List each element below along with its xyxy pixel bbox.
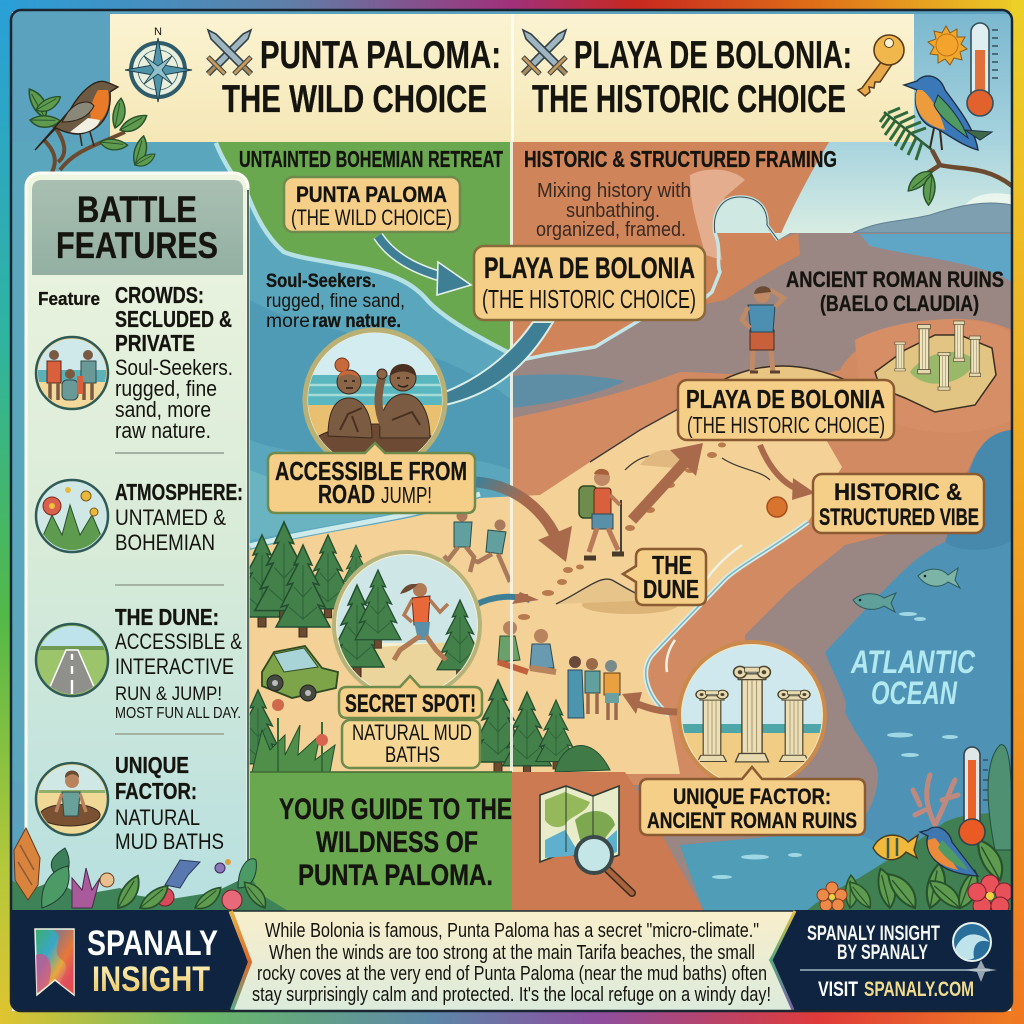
map: terracotta headland, Bolonia side [512, 142, 829, 362]
label: unique factor ruins: ANCIENT ROMAN RUINS [647, 808, 857, 833]
footer: left brand block [11, 910, 250, 1012]
title: Playa de Bolonia: PLAYA DE BOLONIA: [574, 34, 852, 77]
medallion: roman columns [679, 642, 825, 793]
footer: right promo block: VISIT [818, 978, 858, 1001]
footer: right promo block: SPANALY INSIGHT [807, 922, 940, 945]
medallion: mud bath couple [303, 330, 447, 488]
label: Punta Paloma: PUNTA PALOMA [296, 182, 447, 207]
icon: crossed swords left [208, 30, 251, 74]
text: mixing history note: sunbathing. [566, 200, 660, 222]
text: crowds: PRIVATE [115, 330, 195, 356]
title: Punta Paloma: THE WILD CHOICE [222, 78, 487, 121]
center divider [510, 142, 513, 772]
footer: right promo block: BY SPANALY [837, 941, 928, 964]
ruins island [855, 320, 997, 413]
text: crowds: Soul-Seekers. [115, 355, 233, 380]
label: Playa de Bolonia main: (THE HISTORIC CHOICE) [482, 284, 696, 314]
text: ruins label [786, 267, 1004, 316]
text: crowds: SECLUDED & [115, 306, 232, 332]
footer text: rocky coves at the very end of Punta Paloma (near the mud baths) often [257, 963, 767, 985]
text: your guide: YOUR GUIDE TO THE [279, 793, 512, 826]
label: Playa de Bolonia main: PLAYA DE BOLONIA [484, 252, 695, 285]
illustration: robin on branch [28, 81, 157, 172]
title: Punta Paloma [222, 40, 498, 113]
label: accessible from road [268, 443, 475, 513]
car [262, 646, 338, 701]
label: Playa de Bolonia on map: PLAYA DE BOLONIA [686, 384, 885, 414]
label: secret spot: SECRET SPOT! [345, 690, 476, 718]
text: the dune: INTERACTIVE [115, 654, 234, 679]
text: atmosphere: BOHEMIAN [115, 530, 215, 555]
arrow: beach to historic label [632, 443, 703, 520]
icon: crowd circle [36, 337, 108, 409]
arrow: to historic vibe [760, 445, 815, 500]
arrow: road to beach [476, 482, 572, 562]
footer: right promo block: SPANALY.COM [864, 978, 974, 1001]
label: Playa de Bolonia on map: (THE HISTORIC CHOICE) [687, 412, 885, 438]
text: Atlantic Ocean [850, 650, 976, 704]
map: sea strip top right [860, 234, 1012, 282]
icon: crossed swords right [523, 30, 566, 74]
text: atmosphere [115, 479, 243, 555]
ocean ripples [712, 612, 958, 879]
subheading: historic framing: HISTORIC & STRUCTURED FRAMING [524, 146, 837, 172]
icon: thermometer bottom [959, 747, 988, 845]
bottom right terracotta with map [512, 772, 704, 912]
text: soul-seekers note [266, 271, 405, 332]
label: the dune: THE [652, 550, 692, 580]
text: mixing history note: organized, framed. [536, 219, 686, 241]
panel heading: BATTLE [77, 189, 197, 230]
text: soul-seekers note: rugged, fine sand, [266, 291, 405, 312]
map: gray-brown shallows [512, 233, 1012, 913]
illustration: tropical fish [873, 835, 918, 860]
footer text [252, 920, 771, 1006]
panel heading: FEATURES [56, 225, 218, 266]
text: mixing history note: Mixing history with [537, 180, 691, 202]
label: Punta Paloma: (THE WILD CHOICE) [291, 205, 452, 230]
footer: centre insight strip [226, 911, 797, 1011]
hiker with backpack [579, 469, 624, 558]
text: unique factor: FACTOR: [115, 778, 197, 804]
text: unique factor: NATURAL [115, 805, 200, 830]
text: your guide [279, 798, 512, 886]
runners on the beach [444, 510, 510, 582]
footer text: When the winds are too strong at the main Tarifa beaches, the small [269, 942, 755, 964]
label: accessible from road: ROAD [318, 479, 375, 509]
text: the dune: MOST FUN ALL DAY. [115, 705, 241, 722]
text: crowds [115, 282, 233, 443]
text: crowds: CROWDS: [115, 282, 204, 308]
text: the dune: ACCESSIBLE & [115, 629, 242, 654]
text: Atlantic Ocean: OCEAN [871, 675, 958, 711]
panel: battle features [26, 173, 248, 918]
text: soul-seekers note: raw nature. [312, 311, 401, 332]
label: unique factor ruins [640, 767, 865, 835]
text: crowds: rugged, fine [115, 376, 217, 401]
footprints trail [518, 442, 726, 620]
orange marker [767, 497, 787, 517]
observer on mound [724, 286, 844, 379]
text: soul-seekers note: more [266, 311, 310, 332]
label: historic and structured vibe [813, 474, 984, 533]
bottom left green banner [250, 772, 512, 912]
brand name: INSIGHT [92, 960, 210, 999]
text: the dune: THE DUNE: [115, 604, 219, 630]
bushes and flowers [252, 699, 335, 772]
label: Playa de Bolonia main [474, 246, 705, 320]
footer text: stay surprisingly calm and protected. It's the local refuge on a windy day! [252, 984, 771, 1006]
text: soul-seekers note: Soul-Seekers. [266, 271, 376, 292]
illustration: tropical corner bottom right [805, 745, 1013, 915]
footer text: While Bolonia is famous, Punta Paloma has a secret "micro-climate." [265, 920, 759, 942]
icon: wave logo [953, 923, 997, 982]
text: unique factor: UNIQUE [115, 752, 189, 778]
subheading: bohemian retreat: UNTAINTED BOHEMIAN RETREAT [239, 146, 503, 172]
text: mixing history note [536, 180, 691, 241]
map: Atlantic sea [680, 430, 1012, 912]
icon: thermometer top [967, 23, 998, 116]
icon: compass: N [154, 26, 162, 38]
illustration: blue bird on branch [880, 76, 1012, 206]
map: green land, Punta Paloma side [218, 142, 512, 352]
sitting group [498, 621, 556, 672]
text: atmosphere: ATMOSPHERE: [115, 479, 243, 505]
label: unique factor ruins: UNIQUE FACTOR: [673, 784, 831, 809]
label: accessible from road: ACCESSIBLE FROM [275, 456, 467, 486]
standing group [568, 656, 620, 720]
label: natural mud baths: BATHS [385, 742, 440, 767]
text: Atlantic Ocean: ATLANTIC [850, 644, 976, 680]
column label: Feature [38, 289, 100, 309]
text: the dune: RUN & JUMP! [115, 684, 222, 705]
text: atmosphere: UNTAMED & [115, 505, 226, 530]
panel heading [32, 180, 243, 275]
icon: compass [125, 26, 192, 102]
icon: sun [928, 26, 967, 65]
arrow: Punta Paloma to Bolonia [378, 236, 471, 295]
text: the dune [115, 604, 242, 722]
forest: trees on the beach [234, 522, 610, 775]
arrow: pointer from Bolonia label to mud medallion [445, 322, 553, 405]
text: your guide: PUNTA PALOMA. [298, 859, 493, 892]
fish [853, 568, 960, 612]
dune sand hill [556, 450, 700, 614]
footer: right promo block [770, 910, 1012, 1012]
medallion: runner in forest [330, 552, 483, 700]
label: the dune [623, 549, 706, 605]
arrow: ruins medallion to visitors [622, 692, 678, 714]
text: crowds: raw nature. [115, 418, 211, 443]
illustration: small bird [920, 827, 978, 876]
map: sky, mountain and sea top right [781, 142, 1011, 233]
text: ruins label: (BAELO CLAUDIA) [820, 291, 979, 316]
label: natural mud baths [342, 720, 480, 768]
brand name: SPANALY [87, 924, 218, 963]
brand name [87, 924, 218, 999]
icon: rainbow pennant [35, 929, 74, 995]
text: unique factor [115, 752, 224, 854]
arrow: mud medallion to dune [475, 592, 539, 605]
map: terracotta shore band [512, 319, 1012, 785]
map: central sand beach [250, 385, 842, 774]
illustration: jungle foliage bottom left [11, 828, 290, 912]
text: your guide: WILDNESS OF [316, 826, 478, 859]
label: the dune: DUNE [643, 574, 699, 604]
text: unique factor: MUD BATHS [115, 829, 224, 854]
title: Punta Paloma: PUNTA PALOMA: [260, 34, 501, 77]
title: Playa de Bolonia [532, 40, 850, 113]
label: secret spot [339, 676, 482, 718]
header band [110, 14, 1012, 142]
icon: key [858, 35, 904, 96]
label: natural mud baths: NATURAL MUD [352, 720, 472, 745]
icon: map and magnifier [540, 786, 632, 893]
label: historic and structured vibe: HISTORIC & [834, 479, 962, 506]
title: Playa de Bolonia: THE HISTORIC CHOICE [532, 78, 846, 121]
label: accessible from road: JUMP! [381, 482, 432, 508]
label: Playa de Bolonia on map [678, 380, 894, 440]
text: crowds: sand, more [115, 397, 211, 422]
label: Punta Paloma [284, 177, 460, 232]
icon: mud bath circle [36, 763, 108, 835]
icon: road circle [36, 624, 108, 696]
map: sea on the left [250, 300, 510, 540]
icon: atmosphere flowers circle [36, 480, 108, 552]
